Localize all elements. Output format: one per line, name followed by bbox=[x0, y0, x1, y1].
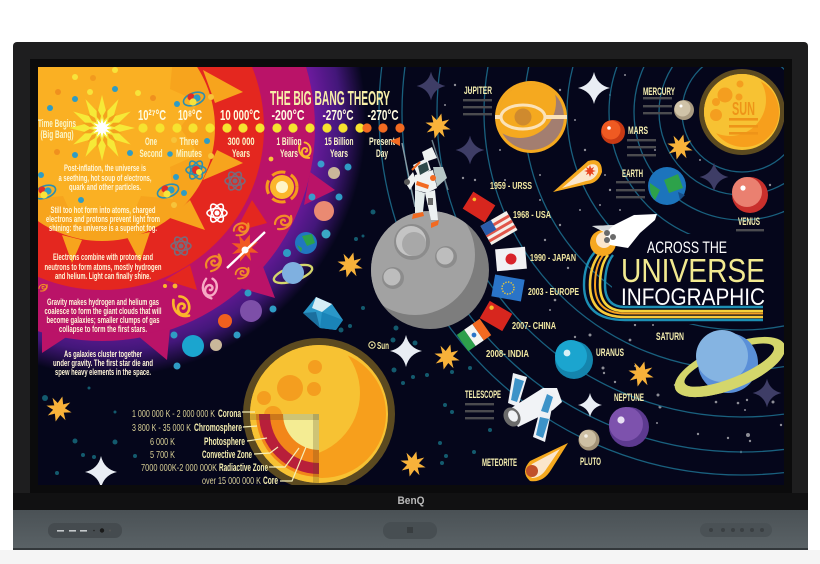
left control pill bbox=[48, 523, 122, 538]
text block: post-inflation: a seething, hot soup of electrons, bbox=[58, 173, 152, 183]
saturn globe bbox=[696, 330, 758, 393]
text block: post-inflation: quark and other particles. bbox=[69, 182, 141, 192]
timeline period labels: Years bbox=[232, 148, 250, 160]
timeline period labels: Years bbox=[280, 148, 298, 160]
text block: gravity bbox=[44, 297, 162, 334]
icon: astronaut with flag bbox=[390, 137, 448, 228]
label: jupiter bbox=[463, 85, 492, 115]
timeline temperatures: -200°C bbox=[272, 107, 305, 124]
background star dust bbox=[444, 74, 782, 453]
label: jupiter: JUPITER bbox=[464, 85, 492, 97]
icon: yellow stars bbox=[43, 110, 696, 480]
flag date labels bbox=[486, 180, 579, 360]
flag: India bbox=[457, 319, 491, 351]
planet: sun: SUN bbox=[732, 99, 755, 119]
timeline period labels bbox=[38, 118, 395, 160]
flag date labels: 1968 - USA bbox=[513, 209, 551, 221]
planet: mars bbox=[601, 120, 625, 144]
flag date labels: 1990 - JAPAN bbox=[530, 252, 576, 264]
center sensor pill bbox=[383, 522, 437, 539]
icon: big bang burst bbox=[69, 95, 135, 161]
icon: dark sparkle stars bbox=[417, 72, 781, 407]
text block: galaxies cluster: As galaxies cluster together bbox=[64, 349, 142, 359]
right port pill bbox=[700, 523, 772, 537]
solar system orbits bbox=[378, 67, 784, 476]
panel: sun cross-section bbox=[232, 329, 395, 490]
page floor below monitor bbox=[0, 550, 820, 564]
timeline period labels: Years bbox=[330, 148, 348, 160]
planet: mercury bbox=[674, 100, 694, 120]
timeline temperatures: 10 000°C bbox=[220, 107, 260, 124]
planet: jupiter bbox=[484, 66, 567, 153]
heading: the big bang theory: THE BIG BANG THEORY bbox=[270, 88, 390, 110]
timeline period labels: One bbox=[145, 136, 157, 148]
sun layer labels: Corona bbox=[218, 408, 242, 420]
timeline period labels: Time Begins bbox=[38, 118, 76, 130]
timeline period labels: 1 Billion bbox=[276, 136, 302, 148]
flag date labels: 2008- INDIA bbox=[486, 348, 529, 360]
title: infographic: INFOGRAPHIC bbox=[621, 284, 765, 311]
magenta ring bbox=[38, 67, 335, 360]
timeline period labels: Day bbox=[376, 148, 389, 160]
flag: Japan bbox=[495, 247, 527, 271]
sun layer labels: 5 700 K bbox=[150, 449, 175, 461]
planet: earth bbox=[648, 167, 686, 205]
timeline temperatures bbox=[138, 109, 398, 120]
title: universe: UNIVERSE bbox=[621, 252, 765, 289]
sun layer labels: 1 000 000 K - 2 000 000 K bbox=[132, 408, 215, 420]
text block: galaxies cluster bbox=[53, 349, 153, 377]
timeline temperatures: 10²⁷°C bbox=[138, 107, 166, 124]
text block: post-inflation bbox=[58, 163, 152, 192]
timeline temperatures: 10⁸°C bbox=[178, 107, 202, 124]
sun layer labels: Core bbox=[263, 475, 278, 487]
label: mars bbox=[627, 125, 656, 156]
sun symbol label bbox=[369, 340, 389, 352]
label: uranus: URANUS bbox=[596, 347, 624, 359]
text block: galaxies cluster: spew heavy elements in the space. bbox=[55, 367, 151, 377]
text block: gravity: become galaxies; smaller clumps of gas bbox=[46, 315, 160, 325]
label: meteorite: METEORITE bbox=[482, 457, 517, 469]
title: across the: ACROSS THE bbox=[647, 239, 727, 257]
flag: USSR bbox=[463, 192, 495, 222]
flag: European Union bbox=[491, 275, 525, 301]
icon: swirls bbox=[39, 142, 312, 316]
sun layer labels: Radiactive Zone bbox=[219, 462, 268, 474]
label: telescope: TELESCOPE bbox=[465, 389, 501, 401]
label: mercury: MERCURY bbox=[643, 86, 675, 98]
purple ring bbox=[38, 67, 364, 374]
icon: atoms bbox=[171, 159, 245, 257]
sun symbol label: Sun bbox=[377, 340, 389, 352]
sun layer labels bbox=[132, 408, 278, 487]
sun layer labels: 6 000 K bbox=[150, 436, 175, 448]
icon: blue gem bbox=[303, 297, 343, 330]
text block: superhot fog: electrons and protons prevent light from bbox=[46, 214, 160, 224]
timeline period labels: Present bbox=[369, 136, 395, 148]
sun layer leader lines bbox=[242, 412, 306, 481]
text block: gravity: collapse to form the first stars. bbox=[59, 324, 147, 334]
brand logo: BenQ bbox=[398, 495, 425, 507]
label: earth bbox=[616, 168, 645, 198]
planet: saturn bbox=[667, 325, 793, 409]
saturn ring back bbox=[667, 325, 793, 409]
label: telescope bbox=[465, 389, 501, 419]
label: venus bbox=[736, 216, 764, 246]
background teal dots bbox=[42, 210, 492, 475]
flag: USA bbox=[481, 211, 517, 245]
text block: superhot fog: shining: the universe is a superhot fog. bbox=[49, 223, 157, 233]
timeline period labels: 300 000 bbox=[228, 136, 254, 148]
timeline temperatures: -270°C bbox=[322, 107, 354, 124]
sun layer labels: over 15 000 000 K bbox=[202, 475, 261, 487]
text block: atoms form bbox=[44, 252, 162, 281]
flag: China bbox=[480, 301, 512, 331]
sun layer labels: 7000 000K-2 000 000K bbox=[141, 462, 217, 474]
timeline period labels: (Big Bang) bbox=[40, 129, 74, 141]
text block: atoms form: Electrons combine with protons and bbox=[53, 252, 153, 262]
panel: timeline bbox=[38, 88, 405, 160]
timeline period labels: Three bbox=[180, 136, 198, 148]
icon: exploding star bbox=[227, 230, 265, 268]
sun layer labels: 3 800 K - 35 000 K bbox=[132, 422, 191, 434]
flag date labels: 2007- CHINA bbox=[512, 320, 556, 332]
label: venus: VENUS bbox=[738, 216, 760, 228]
saturn ring front bbox=[675, 343, 793, 409]
planet: pluto bbox=[578, 430, 600, 450]
label: saturn: SATURN bbox=[656, 331, 684, 343]
planet: uranus bbox=[555, 340, 593, 379]
text block: post-inflation: Post-inflation, the universe is bbox=[64, 163, 146, 173]
sun layer labels: Photosphere bbox=[204, 436, 245, 448]
text block: atoms form: neutrons to form atoms, mostly hydrogen bbox=[44, 262, 162, 272]
label: earth: EARTH bbox=[622, 168, 643, 180]
icon: space shuttle bbox=[590, 214, 657, 256]
rainbow trail bbox=[584, 250, 763, 320]
screen: infographic bbox=[38, 67, 784, 485]
timeline period labels: Minutes bbox=[176, 148, 202, 160]
text block: gravity: Gravity makes hydrogen and helium gas bbox=[47, 297, 159, 307]
icon: meteorite bbox=[525, 443, 568, 481]
icon: white sparkle stars bbox=[85, 72, 610, 488]
planet: neptune bbox=[609, 407, 649, 447]
text block: superhot fog bbox=[46, 205, 160, 233]
flag date labels: 2003 - EUROPE bbox=[528, 286, 579, 298]
icon: protons bbox=[33, 90, 206, 201]
title backing bbox=[612, 234, 784, 324]
planet: venus bbox=[732, 177, 768, 213]
icon: small saturn bbox=[272, 262, 314, 284]
moon bbox=[371, 211, 489, 329]
lighter sun disc with rays bbox=[38, 67, 198, 224]
panel: title block bbox=[584, 214, 784, 324]
icon: spiral galaxy bbox=[267, 172, 297, 202]
red ring bbox=[38, 67, 267, 290]
soundbar bbox=[13, 510, 808, 550]
timeline dots bbox=[138, 123, 405, 133]
orange disc bbox=[38, 67, 243, 263]
icon: comet bbox=[553, 160, 602, 192]
flag date labels: 1959 - URSS bbox=[490, 180, 532, 192]
icon: small earth bbox=[295, 232, 317, 254]
timeline temperatures: -270°C bbox=[368, 107, 399, 124]
planets and dots on purple ring bbox=[170, 160, 352, 370]
planet: sun bbox=[694, 64, 785, 155]
label: mars: MARS bbox=[628, 125, 648, 137]
label: pluto: PLUTO bbox=[580, 456, 601, 468]
timeline period labels: 15 Billion bbox=[324, 136, 354, 148]
icon: space telescope bbox=[500, 373, 562, 442]
flags bbox=[457, 192, 527, 351]
sun layer labels: Convective Zone bbox=[202, 449, 252, 461]
panel: big bang rings bbox=[38, 67, 364, 374]
text block: superhot fog: Still too hot form into atoms, charged bbox=[50, 205, 156, 215]
label: neptune: NEPTUNE bbox=[614, 392, 644, 404]
text block: gravity: coalesce to form the giant clouds that will bbox=[44, 306, 162, 316]
label: mercury bbox=[643, 86, 675, 114]
sun layer labels: Chromosphere bbox=[194, 422, 242, 434]
text block: galaxies cluster: under gravity. The first star die and bbox=[53, 358, 153, 368]
text block: atoms form: and helium. Light can finally shine. bbox=[55, 271, 151, 281]
timeline period labels: Second bbox=[140, 148, 162, 160]
particle dots on sun bbox=[38, 67, 214, 208]
